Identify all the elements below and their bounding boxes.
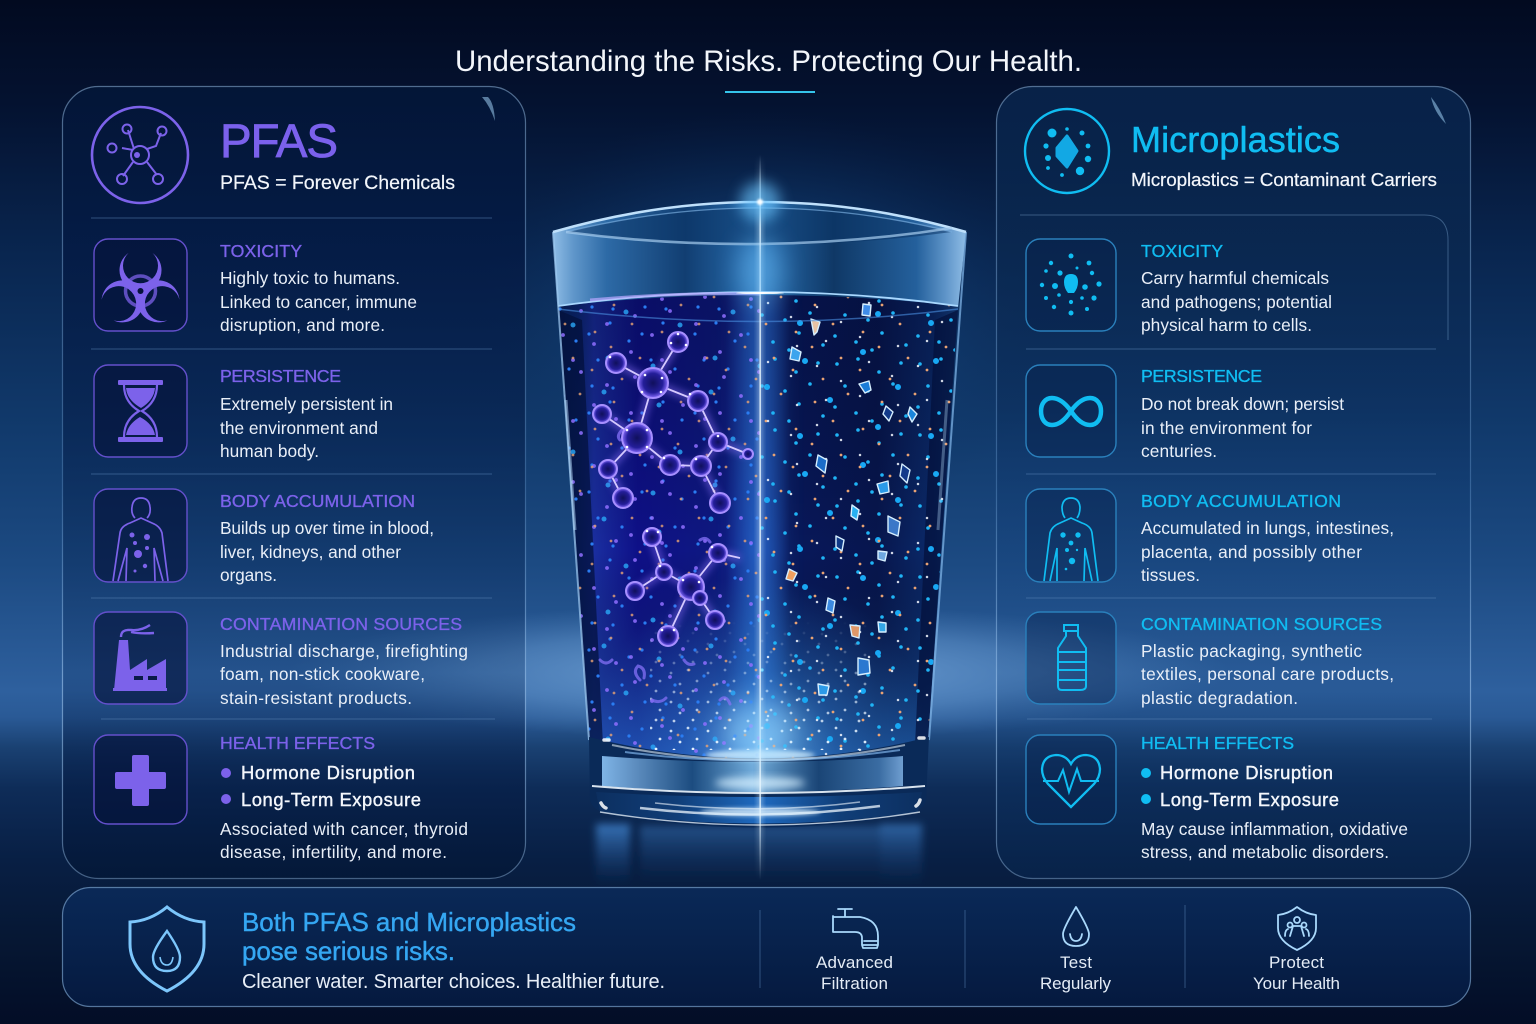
sparkle near glass bottom	[650, 620, 870, 750]
heading: BODY ACCUMULATION	[220, 491, 415, 511]
description: disruption, and more.	[220, 315, 385, 335]
description: human body.	[220, 441, 319, 461]
icon: faucet	[833, 909, 878, 948]
icon: hourglass	[94, 365, 187, 457]
glass base	[589, 737, 929, 828]
PFAS molecule upper	[593, 332, 753, 513]
summary panel background	[62, 888, 1470, 1006]
clear band	[602, 756, 903, 792]
item: test regularly	[1040, 907, 1112, 993]
description: liver, kidneys, and other	[220, 542, 401, 562]
icon: factory	[94, 612, 187, 704]
glass of water	[550, 155, 970, 880]
item: protect your health	[1253, 907, 1340, 993]
item: protect your health: Your Health	[1253, 974, 1340, 993]
rim	[553, 202, 966, 244]
bullets: Long-Term Exposure	[1160, 789, 1339, 810]
description	[220, 394, 393, 461]
summary heading: Both PFAS and Microplastics	[242, 907, 576, 937]
row: Microplastics contamination sources	[1026, 612, 1394, 708]
microplastic fragments	[786, 304, 917, 695]
bullets	[221, 762, 421, 810]
panel: bottom summary	[62, 888, 1470, 1006]
heading: BODY ACCUMULATION	[1141, 491, 1341, 511]
description: in the environment for	[1141, 418, 1312, 438]
description: textiles, personal care products,	[1141, 664, 1394, 684]
heading: TOXICITY	[1141, 241, 1223, 261]
icon: plastic bottle	[1026, 612, 1116, 704]
bullets: Long-Term Exposure	[241, 789, 421, 810]
description: physical harm to cells.	[1141, 315, 1312, 335]
particles: microplastics side	[760, 290, 970, 760]
icon: body	[1026, 489, 1116, 582]
item: advanced filtration	[816, 909, 893, 993]
purple particle clusters	[600, 430, 730, 704]
description: Linked to cancer, immune	[220, 292, 417, 312]
row: Microplastics persistence	[1026, 365, 1344, 461]
description: centuries.	[1141, 441, 1217, 461]
description: and pathogens; potential	[1141, 292, 1332, 312]
Microplastics tagline: Microplastics = Contaminant Carriers	[1131, 170, 1437, 191]
PFAS panel background	[62, 86, 526, 878]
lower lens	[596, 792, 922, 824]
description: tissues.	[1141, 565, 1200, 585]
description: Carry harmful chemicals	[1141, 268, 1329, 288]
description	[220, 268, 417, 335]
base body	[589, 737, 929, 828]
icon: medical cross	[94, 735, 187, 824]
bullets: Hormone Disruption	[241, 762, 415, 783]
item: advanced filtration: Filtration	[821, 974, 888, 993]
glass upper wall	[553, 202, 966, 308]
item: protect your health: Protect	[1269, 953, 1324, 972]
item: test regularly: Test	[1060, 953, 1092, 972]
row: PFAS contamination sources	[94, 612, 468, 708]
icon: shield with people	[1278, 907, 1316, 950]
icon: water drop	[1063, 907, 1089, 946]
heading: HEALTH EFFECTS	[1141, 733, 1294, 753]
inner frame	[1020, 215, 1448, 340]
icon: heartbeat	[1026, 735, 1116, 824]
Microplastics particles icon	[1025, 109, 1109, 193]
description	[1141, 268, 1332, 335]
description: foam, non-stick cookware,	[220, 664, 425, 684]
description: Industrial discharge, firefighting	[220, 641, 468, 661]
description: Associated with cancer, thyroid	[220, 819, 468, 839]
heading: CONTAMINATION SOURCES	[1141, 614, 1382, 634]
description: Plastic packaging, synthetic	[1141, 641, 1362, 661]
description	[220, 518, 434, 585]
particles: PFAS side	[550, 290, 760, 760]
description: stain-resistant products.	[220, 688, 412, 708]
accent line under heading	[725, 91, 815, 93]
description: plastic degradation.	[1141, 688, 1298, 708]
item: test regularly: Regularly	[1040, 974, 1112, 993]
summary heading: pose serious risks.	[242, 936, 455, 966]
row: Microplastics health effects	[1026, 733, 1408, 862]
row: PFAS body accumulation	[94, 489, 434, 585]
description: Accumulated in lungs, intestines,	[1141, 518, 1394, 538]
description: organs.	[220, 565, 277, 585]
heading: HEALTH EFFECTS	[220, 733, 375, 753]
row: PFAS health effects	[94, 733, 468, 862]
heading: PERSISTENCE	[1141, 366, 1262, 386]
PFAS tagline: PFAS = Forever Chemicals	[220, 172, 455, 194]
row: Microplastics body accumulation	[1026, 489, 1394, 585]
Microplastics panel background	[996, 86, 1470, 878]
panel: Microplastics	[996, 86, 1470, 878]
description: the environment and	[220, 418, 378, 438]
summary tagline: Cleaner water. Smarter choices. Healthier future.	[242, 971, 665, 993]
description	[1141, 394, 1344, 461]
row: Microplastics toxicity	[1026, 239, 1332, 335]
summary heading	[242, 907, 576, 966]
heading: TOXICITY	[220, 241, 302, 261]
description	[220, 819, 468, 862]
description	[1141, 641, 1394, 708]
icon: particles	[1026, 239, 1116, 331]
description: Extremely persistent in	[220, 394, 393, 414]
description	[1141, 518, 1394, 585]
description: Do not break down; persist	[1141, 394, 1344, 414]
PFAS molecule lower	[626, 528, 740, 646]
heading: CONTAMINATION SOURCES	[220, 614, 462, 634]
icon: biohazard	[94, 239, 187, 331]
heading: PERSISTENCE	[220, 366, 341, 386]
description: May cause inflammation, oxidative	[1141, 819, 1408, 839]
description	[1141, 819, 1408, 862]
description: Builds up over time in blood,	[220, 518, 434, 538]
central light beam	[726, 155, 794, 880]
water surface	[558, 292, 958, 322]
bullets	[1141, 762, 1339, 810]
PFAS molecule icon	[92, 107, 188, 203]
icon: shield with drop	[130, 907, 204, 991]
Microplastics title: Microplastics	[1131, 119, 1340, 160]
water body	[558, 295, 958, 759]
item: advanced filtration: Advanced	[816, 953, 893, 972]
description: Highly toxic to humans.	[220, 268, 400, 288]
description: stress, and metabolic disorders.	[1141, 842, 1389, 862]
glass walls	[553, 232, 966, 740]
description: disease, infertility, and more.	[220, 842, 447, 862]
table reflection under glass	[596, 824, 922, 886]
row: PFAS toxicity	[94, 239, 417, 335]
icon: infinity	[1026, 365, 1116, 457]
icon: body	[94, 489, 187, 582]
panel: PFAS	[62, 86, 526, 878]
subtitle heading: Understanding the Risks. Protecting Our Health.	[455, 45, 1082, 78]
description	[220, 641, 468, 708]
bullets: Hormone Disruption	[1160, 762, 1333, 783]
description: placenta, and possibly other	[1141, 542, 1362, 562]
row: PFAS persistence	[94, 365, 393, 461]
PFAS title: PFAS	[220, 115, 338, 168]
